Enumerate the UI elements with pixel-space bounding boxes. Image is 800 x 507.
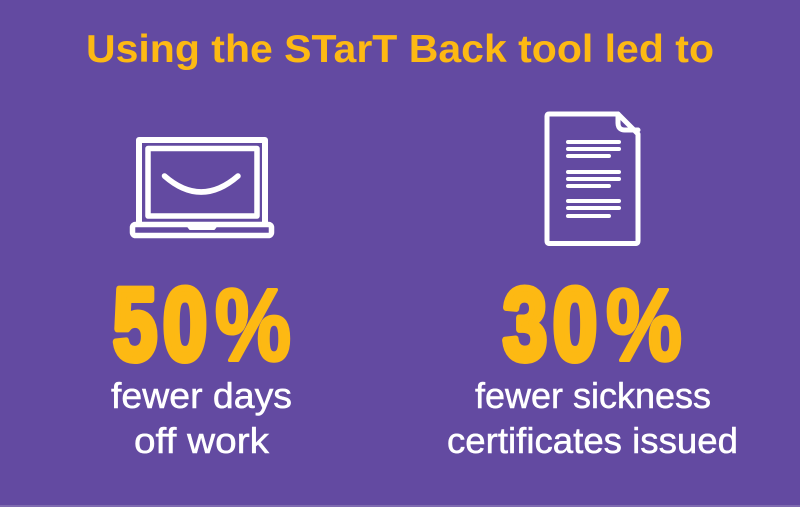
title: Using the STarT Back tool led to [86,28,714,71]
statistic: 30%: % [606,268,682,382]
statistic: 50%: 5 [113,268,157,382]
label: fewer days off work: fewer days [111,375,292,416]
label: fewer sickness certificates issued: certificates issued [447,420,738,461]
statistic: 50%: % [215,268,291,382]
statistic: 50% [113,268,291,382]
icon: document [547,114,638,244]
label: fewer days off work [111,375,292,461]
statistic: 50%: 0 [163,268,207,382]
statistic: 30%: 3 [503,268,547,382]
label: fewer sickness certificates issued: fewer sickness [475,375,711,416]
label: fewer days off work: off work [134,420,270,461]
icon: laptop with smile [132,140,272,236]
statistic: 30%: 0 [553,268,597,382]
statistic: 30% [503,268,682,382]
label: fewer sickness certificates issued [447,375,738,461]
